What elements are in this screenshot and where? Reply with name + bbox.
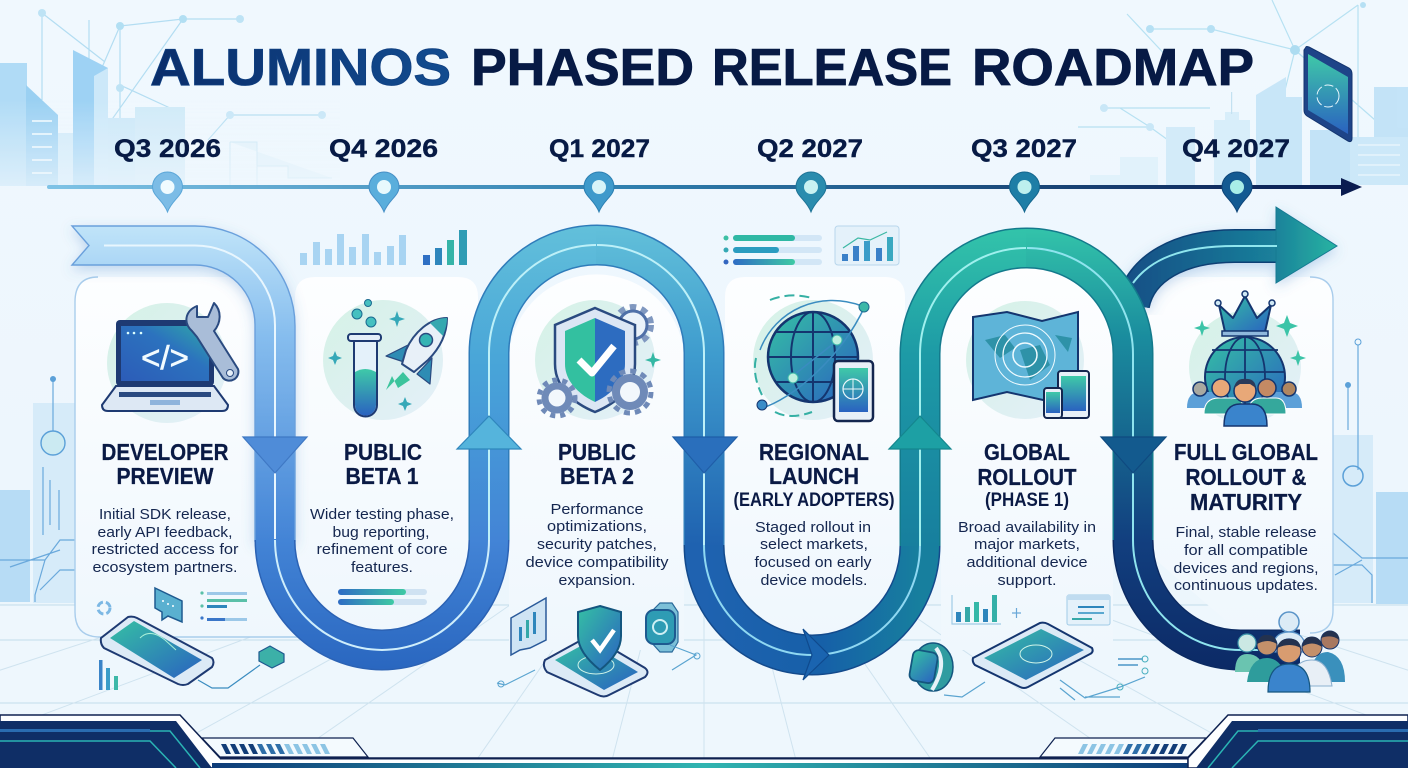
card text: public beta 1: refinement of core <box>316 541 448 558</box>
card text: public beta 1: features. <box>351 559 413 576</box>
title: PHASED <box>471 39 694 97</box>
card text: public beta 1: Wider testing phase, <box>310 506 454 523</box>
card text: regional launch: device models. <box>760 572 868 589</box>
card text: regional launch: LAUNCH <box>769 463 859 489</box>
footer frame: left corner <box>0 715 1188 768</box>
ribbon segment: first U turn <box>275 539 489 650</box>
footer frame: right chip with stripes <box>1040 738 1206 757</box>
footer frame: bottom glow bar <box>212 758 1197 768</box>
ribbon segment: first arch descending <box>596 245 704 546</box>
quarter labels: Q4 2027 <box>1182 135 1290 163</box>
panel: regional launch card <box>725 277 905 640</box>
ribbon segment: second U turn <box>704 545 920 655</box>
card text: public beta 2: PUBLIC <box>558 439 636 465</box>
icon: globe with phone <box>753 295 873 421</box>
card text: regional launch: REGIONAL <box>759 439 869 465</box>
decorative bar chart above beta 1 <box>300 230 467 265</box>
decor: tablet, watch, chart and window under global rollout <box>909 595 1148 700</box>
quarter labels: Q3 2026 <box>114 135 221 163</box>
decorative lists and chart above regional launch <box>724 226 899 265</box>
quarter labels: Q2 2027 <box>757 135 863 163</box>
icon: test tube and rocket <box>323 300 447 420</box>
title <box>150 39 1254 97</box>
ribbon segment: first arch rising <box>489 245 597 540</box>
title: RELEASE <box>712 39 952 97</box>
card text: developer preview: Initial SDK release, <box>99 506 231 523</box>
card text: developer preview: PREVIEW <box>116 463 214 489</box>
card text: developer preview: DEVELOPER <box>102 439 229 465</box>
card text: full global rollout: MATURITY <box>1190 489 1302 515</box>
icon: laptop with wrench <box>102 303 238 423</box>
card text: full global rollout: ROLLOUT & <box>1186 464 1306 490</box>
background: right tech panels <box>1333 339 1408 604</box>
card text: global rollout <box>958 439 1096 589</box>
title: ALUMINOS <box>150 39 451 97</box>
card text: full global rollout: continuous updates. <box>1174 577 1318 594</box>
card text: public beta 1 <box>310 439 454 576</box>
card text: full global rollout: for all compatible <box>1184 542 1308 559</box>
background: left city skyline <box>0 9 340 190</box>
ribbon segment: start flag and first descent <box>72 226 295 545</box>
icon: shield with gears <box>535 300 661 420</box>
card text: developer preview: ecosystem partners. <box>92 559 238 576</box>
title: ROADMAP <box>972 39 1254 97</box>
quarter labels: Q4 2026 <box>329 135 438 163</box>
card text: developer preview: early API feedback, <box>98 524 232 541</box>
card text: global rollout: ROLLOUT <box>978 464 1076 490</box>
card text: full global rollout: devices and regions, <box>1174 560 1318 577</box>
card text: regional launch: Staged rollout in <box>755 519 871 536</box>
background: right city skyline <box>1078 0 1408 185</box>
footer frame: right corner <box>1188 715 1408 768</box>
card text: public beta 1: PUBLIC <box>344 439 422 465</box>
panel: global rollout card <box>941 268 1113 650</box>
card text: full global rollout <box>1174 439 1318 594</box>
card text: public beta 2: Performance <box>550 501 644 518</box>
card text: public beta 1: bug reporting, <box>332 524 430 541</box>
ribbon: serpentine timeline path <box>72 226 1300 655</box>
card text: global rollout: support. <box>998 572 1056 589</box>
background: perspective floor grid <box>0 605 1408 768</box>
timeline axis with arrow <box>47 178 1362 196</box>
card text: global rollout: GLOBAL <box>984 439 1070 465</box>
panel: public beta 1 card <box>295 277 478 635</box>
ribbon segment: second arch descending and final sweep <box>1026 248 1300 650</box>
card text: global rollout: additional device <box>966 554 1088 571</box>
card text: developer preview: restricted access for <box>92 541 238 558</box>
card text: public beta 2 <box>526 439 669 589</box>
decor: phone, chat bubble and lists under developer preview <box>98 588 284 690</box>
card text: public beta 1: BETA 1 <box>346 463 419 489</box>
quarter labels: Q3 2027 <box>971 135 1077 163</box>
icon: floating tablet top right <box>1304 46 1352 142</box>
arrowheads on the ribbon <box>243 416 1166 680</box>
panel: developer preview card <box>75 277 300 637</box>
quarter labels <box>114 135 1290 163</box>
card text: full global rollout: Final, stable release <box>1176 524 1316 541</box>
card text: public beta 2: device compatibility <box>526 554 669 571</box>
decor: shield on phone with chart and watch under beta 2 <box>497 598 700 696</box>
icon: world map with devices <box>966 301 1089 419</box>
card text: full global rollout: FULL GLOBAL <box>1174 439 1318 465</box>
panel: public beta 2 card <box>509 274 684 650</box>
background: left tech panels <box>0 376 75 603</box>
quarter labels: Q1 2027 <box>549 135 650 163</box>
card text: regional launch: focused on early <box>754 554 872 571</box>
card text: global rollout: (PHASE 1) <box>985 490 1069 511</box>
card text: public beta 2: security patches, <box>537 536 657 553</box>
card text: public beta 2: BETA 2 <box>560 463 634 489</box>
panel: full global rollout card <box>1133 277 1333 633</box>
card text: regional launch: select markets, <box>760 536 868 553</box>
decor: progress bars under beta 1 <box>338 589 427 605</box>
card text: public beta 2: optimizations, <box>547 518 647 535</box>
decor: people group at end of ribbon <box>1235 612 1345 692</box>
card text: public beta 2: expansion. <box>558 572 636 589</box>
card text: global rollout: major markets, <box>974 536 1080 553</box>
icon: laptop with wrench: </> <box>141 339 189 376</box>
card text: regional launch: (EARLY ADOPTERS) <box>734 490 894 511</box>
ribbon segment: second arch rising <box>920 248 1027 546</box>
footer frame: left chip with stripes <box>202 738 368 757</box>
card text: regional launch <box>734 439 894 589</box>
card text: global rollout: Broad availability in <box>958 519 1096 536</box>
card text: developer preview <box>92 439 238 576</box>
final arrow to the right <box>1133 207 1337 305</box>
icon: crown, globe and community <box>1187 291 1306 426</box>
timeline pins <box>152 172 1252 212</box>
